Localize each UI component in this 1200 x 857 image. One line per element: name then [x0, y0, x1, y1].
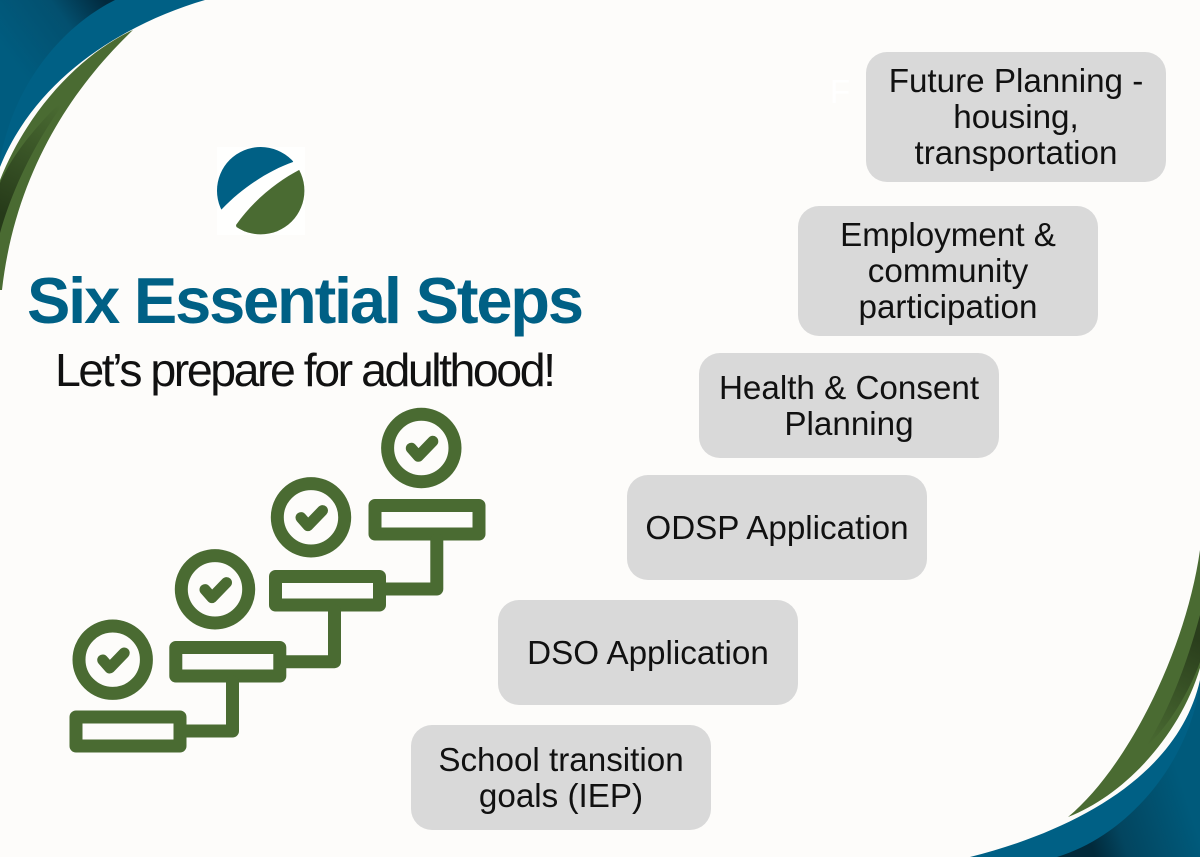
step box: School: School transition — [438, 742, 684, 779]
step box: Health — [699, 353, 999, 458]
bottom-right blue swoosh — [970, 680, 1200, 857]
step box: Future Planning: transportation — [915, 135, 1117, 172]
step box: Employment — [798, 206, 1098, 336]
step box: DSO: DSO Application — [527, 635, 769, 672]
step 2 platform — [176, 648, 280, 676]
step box: ODSP: ODSP Application — [645, 510, 909, 547]
step box: DSO — [498, 600, 798, 705]
step 1 platform — [76, 717, 180, 746]
check circle 4 — [388, 414, 455, 482]
step box: Employment: Employment & — [840, 217, 1056, 254]
title: Six Essential Steps — [27, 264, 584, 337]
step box: Health: Planning — [784, 406, 914, 442]
step box: School — [411, 725, 711, 830]
icon: staircase with checkmarks — [76, 414, 479, 746]
stair connectors — [186, 540, 437, 731]
step 4 platform — [375, 506, 479, 534]
top-left green swoosh — [0, 30, 133, 290]
check circle 1 — [79, 626, 146, 693]
icon: logo — [217, 147, 304, 234]
step box: ODSP — [627, 475, 927, 580]
check circle 2 — [181, 556, 249, 623]
step box: Future Planning: housing, — [953, 99, 1079, 136]
step box: Future Planning — [866, 52, 1166, 182]
step box: Employment: community — [868, 253, 1028, 290]
top-left blue swoosh — [0, 0, 205, 167]
step box: Health: Health & Consent — [719, 370, 979, 407]
step box: Employment: participation — [859, 289, 1037, 326]
check circle 3 — [277, 484, 345, 551]
step box: School: goals (IEP) — [479, 778, 643, 814]
step 3 platform — [276, 576, 380, 605]
subtitle: Let’s prepare for adulthood! — [55, 344, 556, 396]
faint hidden letters behind the top box: F — [830, 73, 850, 110]
bottom-right green swoosh — [1068, 550, 1200, 817]
step box: Future Planning: Future Planning - — [889, 63, 1143, 100]
